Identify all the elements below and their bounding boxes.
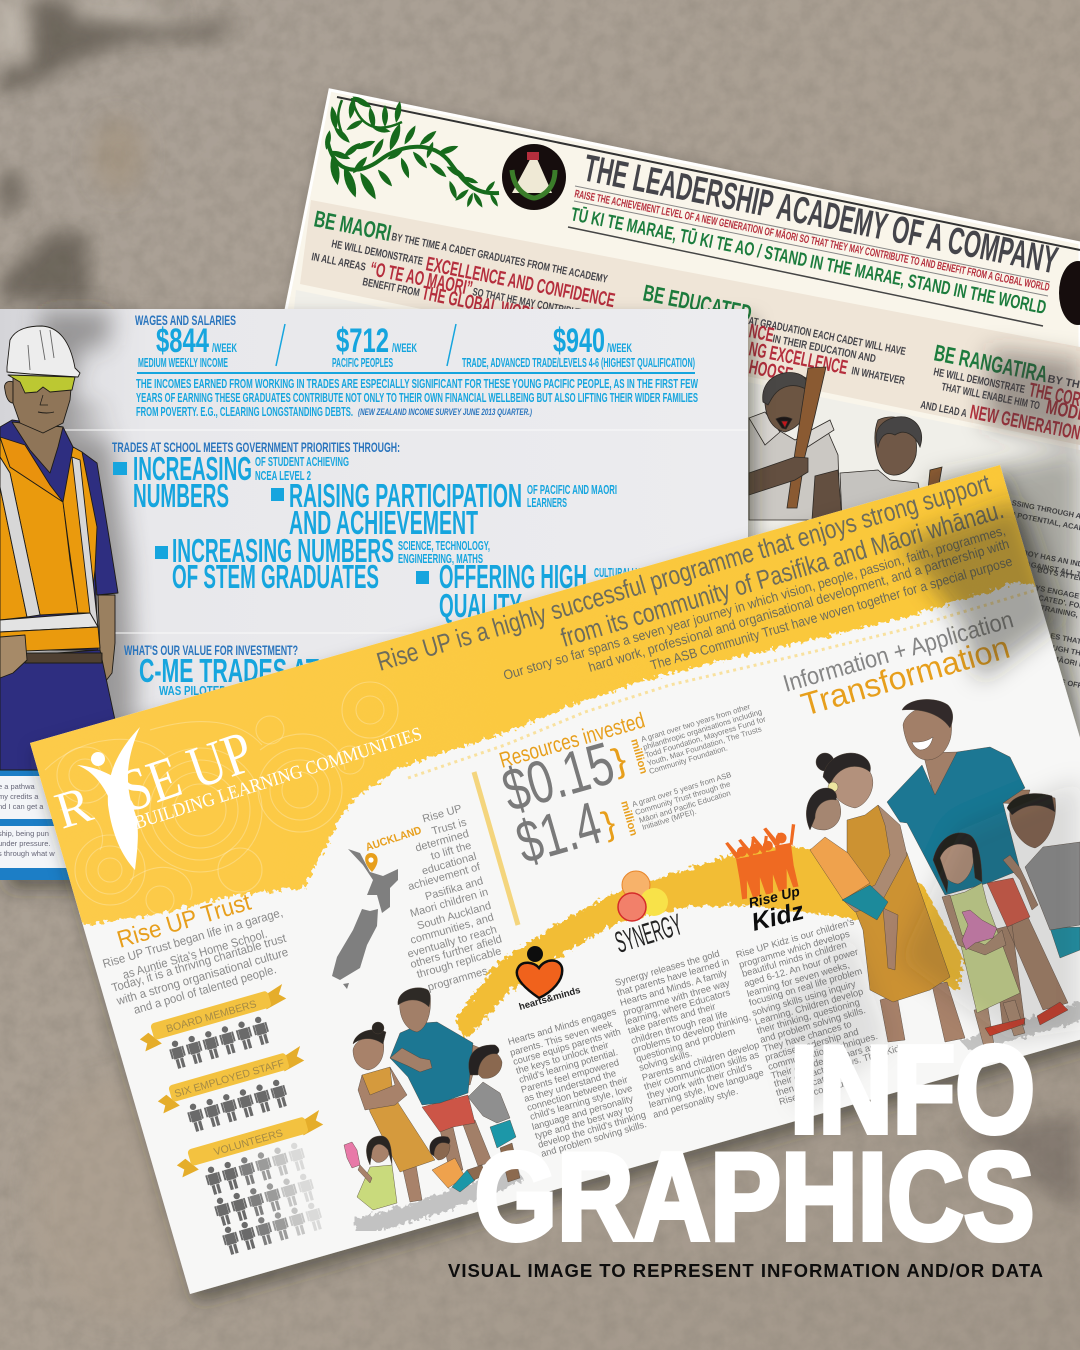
text column: kidz: practise leadership and [764, 1026, 860, 1063]
text column: hearts and minds: connection between their [526, 1074, 629, 1113]
text column: kidz: Rise UP Kidz is our children's [735, 915, 856, 960]
text column: hearts and minds: develop the child's thinking [537, 1109, 647, 1150]
panel: trades wages sheet [0, 309, 748, 880]
text column: synergy: learning, where Educators [624, 986, 732, 1027]
text block: be maori: “O TE AO MAORI” [368, 258, 474, 300]
text column: synergy: and personality style. [652, 1085, 739, 1120]
girl [933, 833, 1025, 1047]
illustration: family smiling (large) [806, 699, 1080, 1052]
priority: raising participation: RAISING PARTICIPATION [289, 477, 522, 514]
heading: transformation: Transformation [797, 629, 1014, 723]
stat: trade qualification [462, 322, 695, 370]
text column: kidz: beautiful minds in children [741, 938, 848, 979]
text column: synergy: that parents have learned in [616, 955, 730, 998]
icon: academy emblem [502, 144, 566, 210]
title: infographics [474, 1022, 1035, 1266]
illustration: construction worker [0, 326, 128, 770]
text column: synergy: learning style, love language [648, 1067, 765, 1110]
text block: trust mission: achievement of [407, 861, 483, 893]
logo: rise up [49, 718, 425, 870]
text block: trust mission: Rise UP [421, 803, 463, 825]
text column: synergy: solving skills. [638, 1047, 693, 1073]
stat: median income: /WEEK [212, 341, 237, 355]
stat: $1.4 million: Initiative (MPEI). [641, 807, 698, 832]
text column: hearts and minds: child's learning potential. [518, 1046, 619, 1085]
people: staff [185, 1078, 290, 1133]
worker shadow [40, 310, 135, 770]
icon: hearts and minds [517, 946, 582, 1013]
ribbon: volunteers [173, 1110, 327, 1178]
intro text: Our story so far spans a seven year journey in which vision, people, passion, faith, programmes, [502, 523, 1007, 683]
stat: median income: MEDIUM WEEKLY INCOME [138, 355, 228, 370]
logo: rise up: BUILDING LEARNING COMMUNITIES [132, 724, 425, 834]
text column: hearts and minds: Hearts and Minds engages [507, 1005, 618, 1047]
text column: kidz: their thinking, questioning [756, 996, 861, 1036]
text block: be rangatira [919, 339, 1080, 445]
text block: trust mission: Maori children in [409, 886, 490, 920]
stat: $0.15 million: million [628, 738, 650, 776]
mother [816, 753, 965, 1042]
text block: trust mission: Pasifika and [424, 875, 485, 903]
text block: incomes: THE INCOMES EARNED FROM WORKING IN TRADES ARE ESPECIALLY SIGNIFICANT FOR THESE YOUNG PACIFIC PEOPLE, AS IN THE FIRST FEW [136, 376, 698, 391]
header rule [337, 97, 1080, 250]
stat: $1.4 million: $1.4 [509, 789, 608, 876]
stat: $0.15 million [495, 702, 767, 824]
heading: resources invested: Resources invested [496, 707, 648, 773]
text block: be maori: THE GLOBAL WORLD [420, 282, 547, 328]
label: auckland: AUCKLAND [364, 825, 423, 854]
priority: stem graduates: OF STEM GRADUATES [172, 558, 379, 595]
icon: rise up kidz: Kidz [749, 897, 807, 937]
girl [344, 1136, 397, 1210]
text block: be maori: EXCELLENCE AND CONFIDENCE [424, 253, 617, 312]
text block: be maori: BENEFIT FROM [361, 276, 421, 299]
c-me trades: C-ME TRADES AT S [139, 652, 339, 689]
priority: increasing numbers: INCREASING [133, 450, 252, 487]
panel: rise up sheet: SYNERGY [611, 908, 686, 960]
icon: rise up kidz: Rise Up [747, 883, 802, 911]
text block: be educated: IN WHATEVER [850, 365, 906, 387]
subtitle: VISUAL IMAGE TO REPRESENT INFORMATION AND/OR DATA [448, 1260, 1043, 1281]
text column: synergy: problems to develop thinking, [632, 1011, 752, 1055]
text column: kidz: They have chances to [762, 1018, 853, 1054]
text column: synergy: Parents and children develop [641, 1039, 760, 1083]
text block: trust mission: South Auckland [416, 900, 493, 932]
text block: trust story: and a pool of talented people. [132, 962, 278, 1017]
text block: be educated: IN THEIR EDUCATION AND [771, 333, 877, 365]
ribbon: staff: SIX EMPLOYED STAFF [173, 1057, 286, 1100]
text block: be maori: BY THE TIME A CADET GRADUATES FROM THE ACADEMY [390, 231, 609, 286]
stat: $0.15 million: philanthropic organisations including [642, 707, 763, 752]
icon: synergy [611, 871, 686, 960]
ribbon: board members [136, 984, 290, 1052]
priority: offering high quality [416, 558, 640, 624]
icon: rise up kidz [725, 822, 807, 937]
sandals [985, 1002, 1068, 1036]
wages heading: WAGES AND SALARIES [135, 312, 236, 328]
text column: hearts and minds [507, 1005, 648, 1159]
stat: $1.4 million [509, 770, 732, 876]
c-me trades: WAS PILOTED WITH [159, 683, 254, 698]
stat: median income [138, 322, 237, 370]
text block: trust mission: Trust is [430, 816, 468, 838]
text column: hearts and minds: Parents feel empowered [520, 1056, 620, 1095]
illustration: cadet seated [840, 417, 942, 520]
boy [1003, 793, 1080, 958]
panel: rise up sheet [20, 440, 1080, 1294]
text block: be educated [641, 279, 907, 387]
toddler [430, 1136, 485, 1192]
text column: synergy: take parents and their [627, 1000, 717, 1036]
priority: increasing numbers [113, 450, 349, 514]
text block: be maori: SO THAT HE MAY CONTRIBUTE TO [471, 286, 600, 323]
ribbon: volunteers: VOLUNTEERS [213, 1127, 284, 1158]
priority: raising participation: OF PACIFIC AND MAORI [527, 482, 617, 497]
logo: rise up: SE UP [113, 718, 261, 824]
priority: stem graduates: SCIENCE, TECHNOLOGY, [398, 538, 490, 553]
stat: $0.15 million: $0.15 [495, 729, 621, 824]
text block: trust story: as Auntie Sita's Home School. [121, 927, 269, 982]
beige band [300, 200, 1080, 445]
footer strips [0, 767, 80, 880]
text block: incomes: (NEW ZEALAND INCOME SURVEY JUNE 2013 QUARTER.) [358, 407, 532, 417]
priority: raising participation [271, 477, 617, 541]
text block: trust mission: through replicable [415, 945, 503, 981]
text column: hearts and minds: type and the best way to [534, 1102, 634, 1141]
ribbon: staff [154, 1046, 308, 1114]
text column: hearts and minds: and problem solving skills. [540, 1118, 648, 1159]
ribbon: board members: BOARD MEMBERS [165, 998, 258, 1035]
priority: offering high quality: CULTURALLY [594, 565, 640, 580]
stat: $0.15 million: } [608, 741, 631, 781]
text block: trust story: Today, it is a thriving charitable trust [110, 931, 288, 995]
stat: trade qualification: TRADE, ADVANCED TRADE/LEVELS 4-6 (HIGHEST QUALIFICATION) [462, 355, 695, 370]
priority: raising participation: AND ACHIEVEMENT [289, 504, 478, 541]
text column: synergy: they work with their child's [646, 1060, 753, 1101]
value heading: WHAT'S OUR VALUE FOR INVESTMENT? [124, 642, 298, 658]
text block: trust mission: others further afield [409, 933, 503, 971]
stat: pacific peoples: /WEEK [392, 341, 417, 355]
warm stain and light patches [0, 0, 210, 1320]
text block: trust story: Rise UP Trust began life in a garage, [101, 905, 284, 971]
text block: trust mission: programmes. [426, 964, 492, 994]
mother [353, 1022, 435, 1202]
stat: $0.15 million: Youth, Max Foundation, The Trusts [646, 724, 763, 768]
illustration: family standing (small) [344, 988, 520, 1228]
stat: $0.15 million: Todd Foundation, Mayoress Fund for [644, 714, 767, 760]
text column: kidz: and problem solving skills. [759, 1004, 867, 1045]
text column: hearts and minds: the keys to unlock their [515, 1039, 610, 1076]
text block: be maori [310, 205, 617, 328]
text block: trust mission: eventually to reach [406, 924, 498, 961]
text column: kidz: then Educators and [775, 1065, 856, 1098]
priority: offering high quality: OFFERING HIGH [439, 558, 587, 595]
stat: $0.15 million: Community Foundation. [648, 743, 729, 776]
illustration: cadet with club [749, 367, 842, 520]
fine print at right [1006, 497, 1080, 691]
text column: kidz: focusing on real life problem [748, 965, 863, 1008]
leaf shadow on sheet [770, 500, 1080, 1110]
panel: leadership academy sheet [182, 90, 1080, 830]
text block: be educated: HOOSE [747, 356, 794, 386]
text column: kidz: communication techniques. [767, 1030, 879, 1072]
father [887, 699, 1068, 1030]
stat: $1.4 million: } [598, 804, 620, 844]
text block: be educated: BE EDUCATED [641, 279, 754, 326]
right edge emblem [1059, 261, 1080, 325]
text block: trust mission: educational [420, 851, 478, 878]
stat: pacific peoples: $712 [336, 322, 389, 360]
text column: synergy [614, 947, 765, 1120]
paisley pattern [45, 682, 398, 914]
priority: stem graduates: ENGINEERING, MATHS [398, 551, 483, 566]
text block: be maori: BE MAORI [312, 205, 394, 246]
heading: rise up trust: Rise UP Trust [114, 889, 254, 954]
text column: synergy: Synergy releases the gold [614, 947, 721, 988]
text block: be maori: HE WILL DEMONSTRATE [330, 238, 424, 268]
text column: kidz: solving skills using inquiry [751, 978, 857, 1018]
text column: kidz [735, 915, 905, 1107]
text block: incomes: YEARS OF EARNING THESE GRADUATES CONTRIBUTE NOT ONLY TO THEIR OWN FINANCIAL WELLBEING BUT ALSO LIFTING THEIR WIDER FAMILIES [136, 390, 698, 405]
text block: trust mission: to lift the [430, 840, 473, 863]
text column: synergy: children through real life [630, 1008, 729, 1046]
father [390, 988, 492, 1172]
text column: synergy: Hearts and Minds. A family [619, 967, 729, 1008]
text column: kidz: Rise Up community [778, 1074, 859, 1107]
text column: kidz: their character grows. Their Kidz [773, 1041, 905, 1089]
text column: kidz: Their confidence soars as [770, 1041, 876, 1081]
yellow arc [455, 846, 964, 1040]
stat: $0.15 million: A grant over two years from other [640, 702, 752, 744]
boy [468, 1045, 520, 1182]
priority: increasing numbers: NCEA LEVEL 2 [255, 468, 311, 483]
text column: synergy: their communication skills as [643, 1048, 761, 1092]
text block: trust mission [406, 803, 503, 994]
logo: rise up: R [49, 776, 99, 840]
heading: information + application: Information + Application [780, 606, 1016, 698]
text column: hearts and minds: child's learning style, love [529, 1082, 633, 1122]
text column: kidz: Learning. Children develop [754, 985, 864, 1027]
shadows on sheet [930, 350, 1080, 800]
text column: hearts and minds: course equips parents with [512, 1026, 622, 1067]
toddler on hip [806, 788, 898, 970]
text column: hearts and minds: as they understand the [523, 1067, 617, 1104]
text block: trust mission: communities, and [409, 911, 495, 947]
text block: incomes [136, 376, 698, 419]
intro text: The ASB Community Trust have woven together for a special purpose [649, 554, 1014, 673]
text block: be educated: NG EXCELLENCE [747, 338, 849, 379]
text column: kidz: aged 6-12. An hour of power [743, 946, 859, 989]
priorities heading: TRADES AT SCHOOL MEETS GOVERNMENT PRIORITIES THROUGH: [112, 439, 400, 455]
text column: hearts and minds: parents. This seven week [509, 1018, 614, 1058]
text block: incomes: FROM POVERTY. E.G., CLEARING LONGSTANDING DEBTS. [136, 404, 353, 419]
text block: trust story: with a strong organisational culture [114, 945, 290, 1008]
priority: increasing numbers: NUMBERS [133, 477, 229, 514]
text block: be maori: IN ALL AREAS [310, 251, 367, 274]
stat: $1.4 million: A grant over 5 years from ASB [631, 770, 732, 809]
stat: $1.4 million: Māori and Pacific Education [638, 788, 732, 825]
brush edge [408, 590, 1036, 778]
people: volunteers [203, 1141, 325, 1256]
priority: offering high quality: QUALITY [439, 587, 522, 624]
text column: synergy: programme with three way [622, 977, 731, 1018]
priority: stem graduates: INCREASING NUMBERS [172, 532, 394, 569]
map: new zealand [332, 849, 398, 989]
icon: hearts and minds: hearts&minds [518, 985, 582, 1013]
icon: green vine [324, 94, 500, 209]
priority: stem graduates [155, 532, 490, 595]
text block: be educated: NCE [747, 320, 776, 347]
stat: pacific peoples: PACIFIC PEOPLES [332, 355, 393, 370]
text column: kidz: learning for seven weeks, [746, 959, 851, 999]
text block: be educated: AT GRADUATION EACH CADET WILL HAVE [747, 315, 907, 358]
intro text: hard work, professional and organisational development, and a partnership with [587, 536, 1011, 675]
stat: trade qualification: $940 [553, 322, 605, 360]
stat: trade qualification: /WEEK [607, 341, 632, 355]
title: infographics: INFO [790, 1022, 1035, 1160]
stat: $1.4 million: million [618, 800, 640, 838]
stat: median income: $844 [156, 322, 209, 360]
text block: be rangatira: AND LEAD A [919, 399, 968, 420]
text block: be rangatira: HE WILL DEMONSTRATE [932, 366, 1026, 396]
c-me trades [139, 652, 339, 698]
text column: synergy: questioning and problem [635, 1025, 736, 1064]
yellow header [20, 440, 1050, 925]
text block: trust story [101, 905, 290, 1017]
priority: raising participation: LEARNERS [527, 495, 567, 510]
text block: trust mission: determined [414, 828, 470, 854]
stat: $1.4 million: Community Trust through the [634, 779, 731, 817]
text column: hearts and minds: language and personality [531, 1092, 635, 1132]
text column: kidz: programme which develops [738, 928, 851, 970]
priority: increasing numbers: OF STUDENT ACHIEVING [255, 454, 349, 469]
people: board [167, 1015, 272, 1070]
